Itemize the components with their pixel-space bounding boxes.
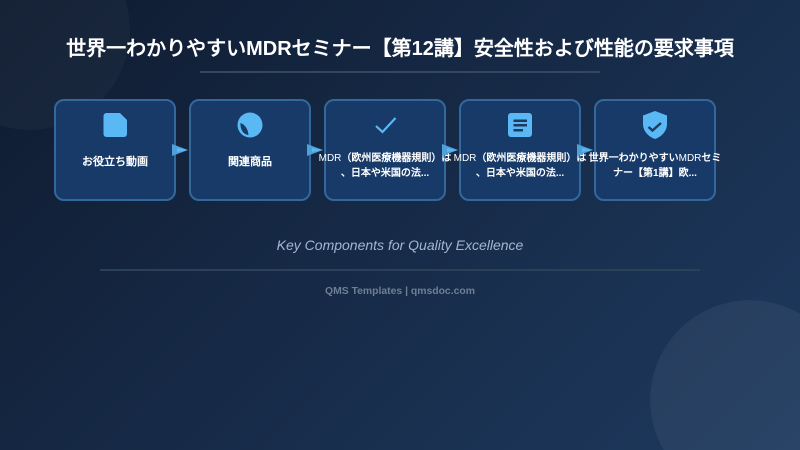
icon: document bbox=[508, 113, 532, 137]
card: MDR 1 bbox=[324, 99, 446, 201]
icon: check bbox=[375, 117, 396, 134]
card label: 、日本や米国の法... bbox=[341, 168, 429, 179]
icon: disc bbox=[238, 112, 262, 138]
arrow 4 bbox=[577, 144, 593, 156]
card label bbox=[588, 152, 721, 179]
card: 関連商品 bbox=[189, 99, 311, 201]
card label: MDR（欧州医療機器規則）は bbox=[454, 153, 586, 164]
card label: 世界一わかりやすいMDRセミ bbox=[589, 153, 721, 164]
icon: shield check bbox=[643, 111, 667, 139]
card label: MDR（欧州医療機器規則）は bbox=[319, 153, 451, 164]
arrow 3 bbox=[442, 144, 458, 156]
card: MDR 2 bbox=[459, 99, 581, 201]
decorative circle: top left bbox=[0, 0, 130, 130]
card label: ナー【第1講】欧... bbox=[613, 168, 697, 179]
title: 世界一わかりやすいMDRセミナー【第12講】安全性および性能の要求事項 bbox=[66, 38, 734, 60]
card label: お役立ち動画 bbox=[82, 156, 148, 168]
arrow 1 bbox=[172, 144, 188, 156]
decorative circle: bottom right bbox=[650, 300, 800, 450]
subtitle: Key Components for Quality Excellence bbox=[277, 237, 523, 253]
card: お役立ち動画 bbox=[54, 99, 176, 201]
card: seminar bbox=[594, 99, 716, 201]
footer: QMS Templates | qmsdoc.com bbox=[325, 286, 475, 297]
arrow 2 bbox=[307, 144, 323, 156]
icon: file bbox=[104, 113, 127, 137]
card label bbox=[454, 152, 586, 179]
card label: 、日本や米国の法... bbox=[476, 168, 564, 179]
card label: 関連商品 bbox=[228, 156, 272, 168]
card label bbox=[319, 152, 452, 179]
